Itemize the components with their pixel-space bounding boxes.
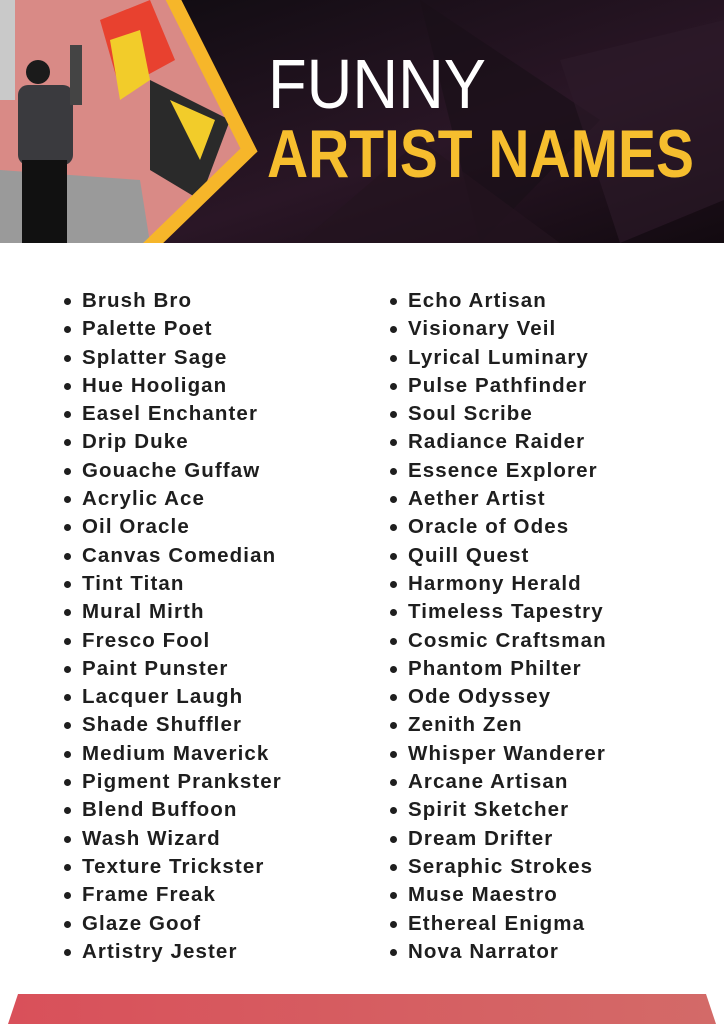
list: left column: Gouache Guffaw	[82, 459, 260, 482]
list: right column: Lyrical Luminary	[408, 346, 589, 369]
list: left column: Drip Duke	[82, 430, 189, 453]
footer bar	[8, 994, 716, 1024]
header banner	[0, 0, 724, 243]
list: left column: Paint Punster	[82, 657, 228, 680]
list: right column: Whisper Wanderer	[408, 742, 606, 765]
list: right column: Ode Odyssey	[408, 685, 551, 708]
mural photo	[0, 0, 249, 243]
list: left column: Frame Freak	[82, 883, 216, 906]
list: right column: Cosmic Craftsman	[408, 629, 607, 652]
list: right column: Visionary Veil	[408, 317, 556, 340]
list: left column: Blend Buffoon	[82, 798, 238, 821]
list: right column: Muse Maestro	[408, 883, 558, 906]
yellow chevron border	[148, 0, 249, 248]
list: left column: Splatter Sage	[82, 346, 227, 369]
list: right column: Oracle of Odes	[408, 515, 569, 538]
list: left column: Lacquer Laugh	[82, 685, 243, 708]
list: left column: Canvas Comedian	[82, 544, 276, 567]
list: left column: Wash Wizard	[82, 827, 221, 850]
list: right column: Seraphic Strokes	[408, 855, 593, 878]
list: right column: Zenith Zen	[408, 713, 523, 736]
list: left column: Pigment Prankster	[82, 770, 282, 793]
list: left column: Artistry Jester	[82, 940, 238, 963]
list: left column: Fresco Fool	[82, 629, 210, 652]
list: right column: Aether Artist	[408, 487, 546, 510]
list: right column: Ethereal Enigma	[408, 912, 585, 935]
list: left column: Medium Maverick	[82, 742, 269, 765]
list: right column: Quill Quest	[408, 544, 529, 567]
list: left column: Tint Titan	[82, 572, 184, 595]
list: right column: Arcane Artisan	[408, 770, 568, 793]
list: left column: Brush Bro	[82, 289, 192, 312]
list: left column	[64, 289, 282, 963]
list: right column: Dream Drifter	[408, 827, 553, 850]
list: left column: Mural Mirth	[82, 600, 205, 623]
list: left column: Acrylic Ace	[82, 487, 205, 510]
list: left column: Hue Hooligan	[82, 374, 227, 397]
list: right column: Phantom Philter	[408, 657, 582, 680]
list: right column: Soul Scribe	[408, 402, 533, 425]
list: right column	[390, 289, 607, 963]
list: right column: Echo Artisan	[408, 289, 547, 312]
list: right column: Radiance Raider	[408, 430, 585, 453]
list: right column: Pulse Pathfinder	[408, 374, 587, 397]
person	[18, 85, 73, 165]
list: left column: Shade Shuffler	[82, 713, 242, 736]
title: FUNNY	[268, 45, 486, 123]
list: left column: Oil Oracle	[82, 515, 190, 538]
list: left column: Palette Poet	[82, 317, 213, 340]
list: left column: Easel Enchanter	[82, 402, 258, 425]
list: right column: Essence Explorer	[408, 459, 598, 482]
list: left column: Glaze Goof	[82, 912, 201, 935]
list: right column: Harmony Herald	[408, 572, 582, 595]
list: left column: Texture Trickster	[82, 855, 264, 878]
list: right column: Nova Narrator	[408, 940, 559, 963]
list: right column: Timeless Tapestry	[408, 600, 604, 623]
list: right column: Spirit Sketcher	[408, 798, 569, 821]
